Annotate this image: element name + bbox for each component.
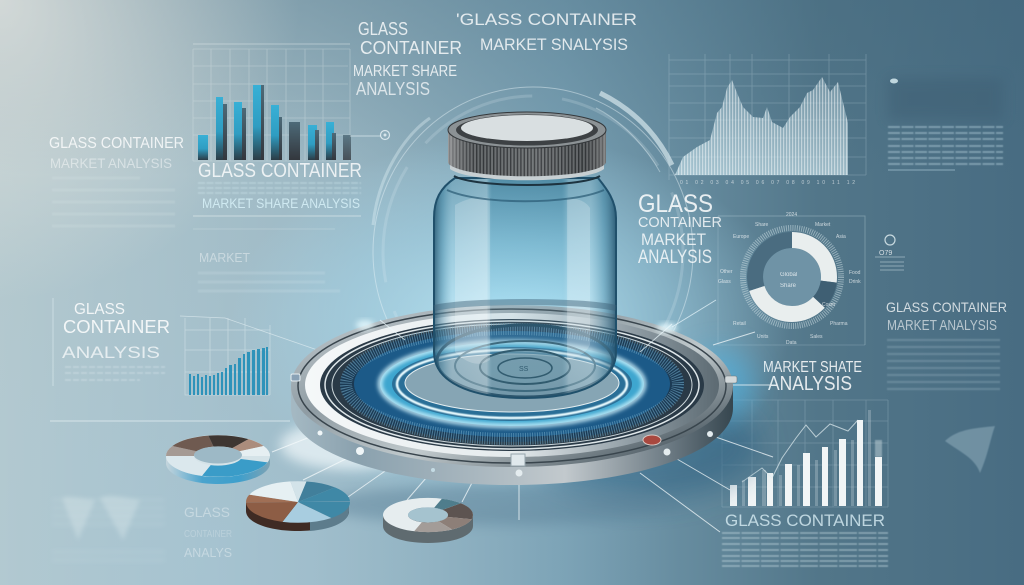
text block: left heading [49,135,184,226]
text block: left container analysis: ANALYSIS [62,343,160,362]
jar rim band seen through glass [434,302,616,308]
donut callout labels: Share [755,222,769,228]
panel: donut chart: Share [780,283,797,289]
donut callout labels: Asia [836,234,846,240]
text block: faint bottom label [184,504,232,560]
text block: top-centre stacked heading [353,19,462,99]
platform side [291,385,733,485]
icon: small gauge with label: O79 [879,250,892,257]
highlight columns [455,198,490,364]
donut callout labels: Drink [849,279,861,285]
white bars [730,420,882,506]
chart: pie [246,492,349,531]
text block: container market analysis right of jar [638,190,722,268]
text block: container market analysis right of jar: ANALYSIS [638,247,712,268]
inner disc [405,354,619,412]
jar base rings [437,325,613,397]
jar [434,112,616,398]
connector lines [272,332,773,532]
text block: top heading: 'GLASS CONTAINER [456,10,637,29]
icon: small gauge with label [875,235,905,270]
donut callout labels: Other [720,269,733,275]
panel: right text block [888,78,1003,170]
icon: target node with leader line [350,130,390,140]
text block: container market analysis right of jar: CONTAINER [638,214,722,231]
donut callout labels: Pharma [830,321,848,327]
text block: right heading: GLASS CONTAINER [886,299,1007,315]
bars [189,347,268,395]
lid side [448,132,606,177]
map silhouette [945,426,995,473]
panel: lower-right bar chart [722,400,888,507]
text block: left container analysis: GLASS [74,301,125,318]
text block: top-centre stacked heading: ANALYSIS [356,79,430,99]
text block: top-centre stacked heading: MARKET SHARE [353,63,457,80]
title: glass container under bar chart: GLASS CONTAINER [198,160,362,182]
text block: left container analysis: CONTAINER [63,317,170,337]
blue hatched band [340,326,684,442]
text block: market share analysis: MARKET SHATE [763,359,862,376]
platform nodes [291,374,737,476]
cyan glowing rings [380,342,644,426]
panel: top-left bar chart [193,44,361,216]
text block: top heading [456,10,637,54]
text block: right heading: MARKET ANALYSIS [887,317,997,334]
text block: lines under lower-right chart [722,533,888,566]
lid lower band [450,165,604,180]
donut callout labels: Cosm [822,302,835,308]
donut callout labels: Units [757,334,769,340]
donut callout labels: Sales [810,334,823,340]
text block: top heading: MARKET SNALYSIS [480,35,628,54]
text block: left heading: GLASS CONTAINER [49,135,184,152]
donut callout labels [718,212,861,346]
glow sparks on platform [356,300,716,352]
text block: container market analysis right of jar: GLASS [638,190,713,218]
panel: donut chart [718,212,865,346]
text block: top-centre stacked heading: CONTAINER [360,38,462,58]
title: glass container lower right: GLASS CONTAINER [725,511,885,530]
text block: right heading [886,299,1007,389]
text block: market share analysis: ANALYSIS [768,373,852,395]
trend line [742,420,858,482]
text block: market share analysis [763,359,862,395]
panel: small teal bar chart [180,316,355,395]
jar shoulder [447,190,604,201]
text block: faint bottom label: ANALYS [184,545,232,560]
platform shadow and glow [280,350,760,525]
jar label mark: SS [519,366,529,373]
text block: top-centre stacked heading: GLASS [358,19,408,39]
text block: faint market label: MARKET [199,250,250,265]
donut callout labels: 2024 [786,212,797,218]
white ring [305,313,719,457]
donut callout labels: Data [786,340,797,346]
platform [291,305,733,485]
text block: left heading: MARKET ANALYSIS [50,155,172,171]
axis labels: 01 02 03 04 05 06 07 08 09 10 11 12 [680,180,855,186]
subtitle: market share analysis: MARKET SHARE ANALYSIS [202,195,360,211]
lid top [448,112,606,148]
donut callout labels: Market [815,222,831,228]
donut callout labels: Europe [733,234,749,240]
text block: lines under bar chart [198,183,361,193]
glass body [434,178,616,398]
bars [198,85,351,160]
text block: faint market label [193,229,340,291]
panel: donut chart: Global [780,272,797,278]
text block: container market analysis right of jar: MARKET [641,230,706,249]
chart: small donut [383,503,473,543]
donut callout labels: Retail [733,321,746,327]
panel: area chart [669,54,866,186]
jar interior tint [434,178,616,398]
text block: left container analysis [53,298,170,386]
connector: horizontal left rule [50,420,290,422]
donut callout labels: Glass [718,279,731,285]
faint secondary bars [742,410,871,506]
decorative orbit ring around the jar [373,87,693,417]
text block: faint bottom label: GLASS [184,504,230,520]
platform rim [291,305,733,467]
chart: donut segmented left [166,435,270,484]
donut callout labels: Food [849,270,861,276]
ghost reflection of chart, bottom left [52,496,165,560]
text block: faint bottom label: CONTAINER [184,529,232,540]
